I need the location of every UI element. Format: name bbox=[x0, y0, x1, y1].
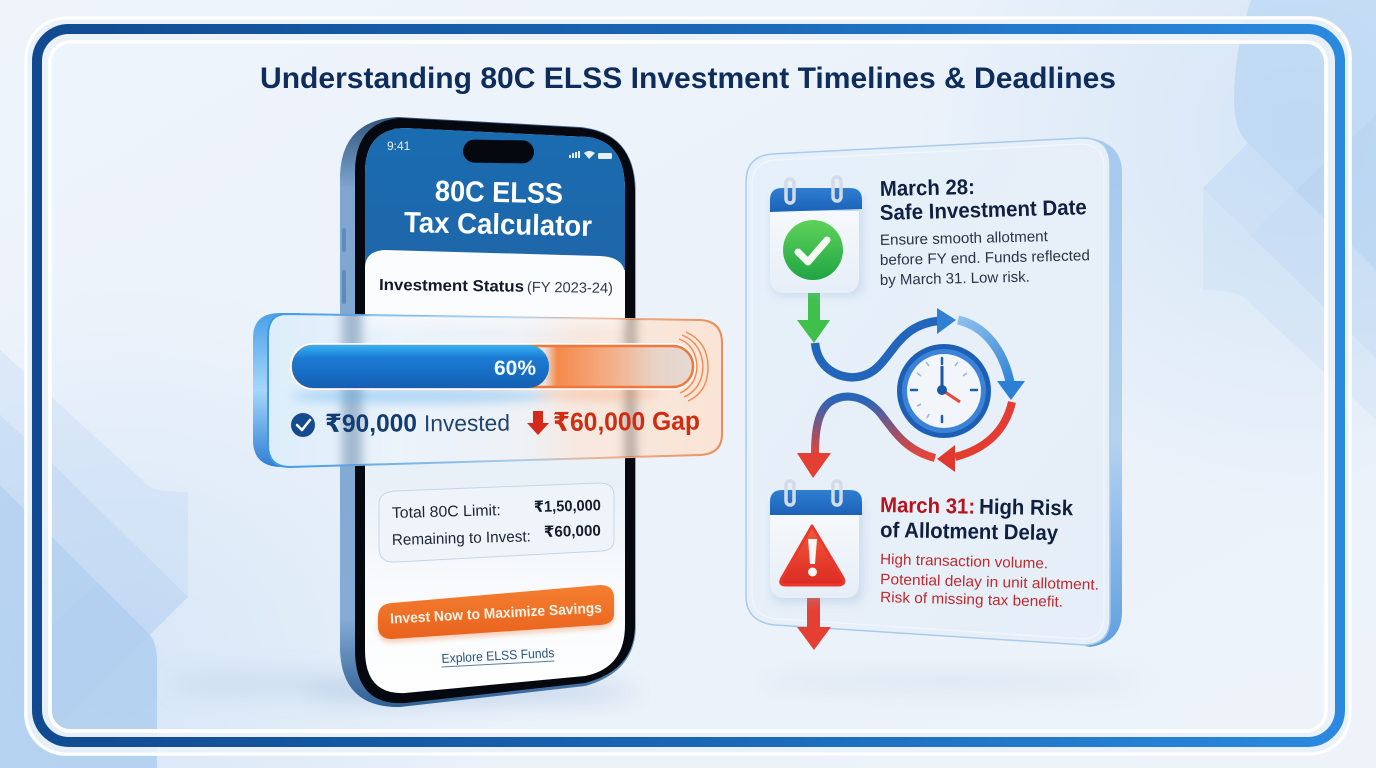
phone bbox=[340, 117, 636, 707]
summary card bbox=[379, 483, 614, 562]
glass left depth bbox=[253, 313, 300, 467]
gap arrow bbox=[527, 411, 549, 435]
phone heading bbox=[404, 176, 592, 243]
text block: safe date: March 28: bbox=[880, 175, 975, 201]
dynamic island bbox=[463, 139, 534, 164]
progress bar bbox=[290, 343, 696, 404]
status icons bbox=[569, 151, 612, 159]
red arrow bbox=[797, 598, 831, 650]
phone body bbox=[340, 117, 636, 707]
clock bbox=[897, 344, 991, 438]
explore link: Explore ELSS Funds bbox=[441, 645, 555, 666]
invested icon bbox=[291, 413, 315, 437]
summary card: ₹1,50,000 bbox=[534, 497, 601, 516]
curve to deadline bbox=[815, 397, 935, 458]
invested amount bbox=[325, 409, 510, 438]
summary card: ₹60,000 bbox=[544, 523, 601, 541]
background decoration: right bbox=[1203, 0, 1376, 420]
phone screen bbox=[360, 120, 630, 700]
investment status label: Investment Status bbox=[379, 277, 524, 296]
status bar time: 9:41 bbox=[387, 139, 411, 153]
calendar: safe date bbox=[770, 177, 862, 295]
progress bar: 60% bbox=[494, 357, 536, 380]
text block: deadline: High transaction volume. bbox=[880, 551, 1048, 572]
blurred phone edges through glass bbox=[336, 315, 642, 466]
green arrow bbox=[797, 293, 830, 343]
phone shadow bbox=[170, 674, 640, 700]
invested amount: ₹90,000 bbox=[325, 409, 417, 438]
invested amount: Invested bbox=[424, 410, 510, 436]
text block: safe date: before FY end. Funds reflected bbox=[880, 247, 1090, 269]
background decoration: left bbox=[0, 350, 188, 768]
panel depth bbox=[1085, 137, 1122, 647]
text block: deadline: March 31: bbox=[880, 493, 975, 519]
floating progress panel bbox=[253, 313, 723, 468]
side buttons bbox=[342, 228, 346, 304]
call to action button: Invest Now to Maximize Savings bbox=[390, 600, 602, 628]
call to action button bbox=[378, 585, 614, 643]
panel inner highlight bbox=[752, 144, 1104, 639]
panel front bbox=[746, 138, 1110, 645]
red arc bbox=[955, 402, 1012, 457]
phone bezel bbox=[355, 118, 635, 703]
text block: safe date bbox=[879, 175, 1090, 289]
timeline glass panel bbox=[746, 137, 1122, 647]
glass front bbox=[268, 314, 722, 467]
summary card: Remaining to Invest: bbox=[392, 528, 531, 549]
investment status label: (FY 2023-24) bbox=[527, 280, 613, 297]
icon: green check bbox=[783, 220, 843, 280]
investment status label bbox=[379, 277, 613, 297]
timeline path and clock bbox=[797, 293, 1025, 650]
text block: deadline: High Risk bbox=[979, 495, 1073, 520]
gap amount: ₹60,000 Gap bbox=[553, 405, 700, 437]
text block: safe date: by March 31. Low risk. bbox=[880, 269, 1030, 289]
text block: deadline: Risk of missing tax benefit. bbox=[880, 589, 1063, 611]
text block: safe date: Ensure smooth allotment bbox=[880, 228, 1049, 249]
text block: deadline: of Allotment Delay bbox=[880, 518, 1058, 545]
right panel shadow bbox=[755, 676, 1145, 688]
title: Understanding 80C ELSS Investment Timelines & Deadlines bbox=[260, 62, 1116, 95]
text block: deadline: Potential delay in unit allotment. bbox=[880, 571, 1099, 594]
phone heading: Tax Calculator bbox=[404, 207, 592, 243]
summary card: Total 80C Limit: bbox=[392, 502, 501, 522]
calendar: deadline bbox=[770, 481, 862, 602]
curve to clock bbox=[815, 321, 938, 377]
phone heading: 80C ELSS bbox=[435, 176, 563, 210]
text block: safe date: Safe Investment Date bbox=[879, 195, 1087, 225]
icon: warning triangle bbox=[781, 526, 844, 585]
text block: deadline bbox=[880, 493, 1099, 611]
arc around clock bbox=[958, 320, 1010, 382]
signal waves bbox=[679, 332, 708, 401]
